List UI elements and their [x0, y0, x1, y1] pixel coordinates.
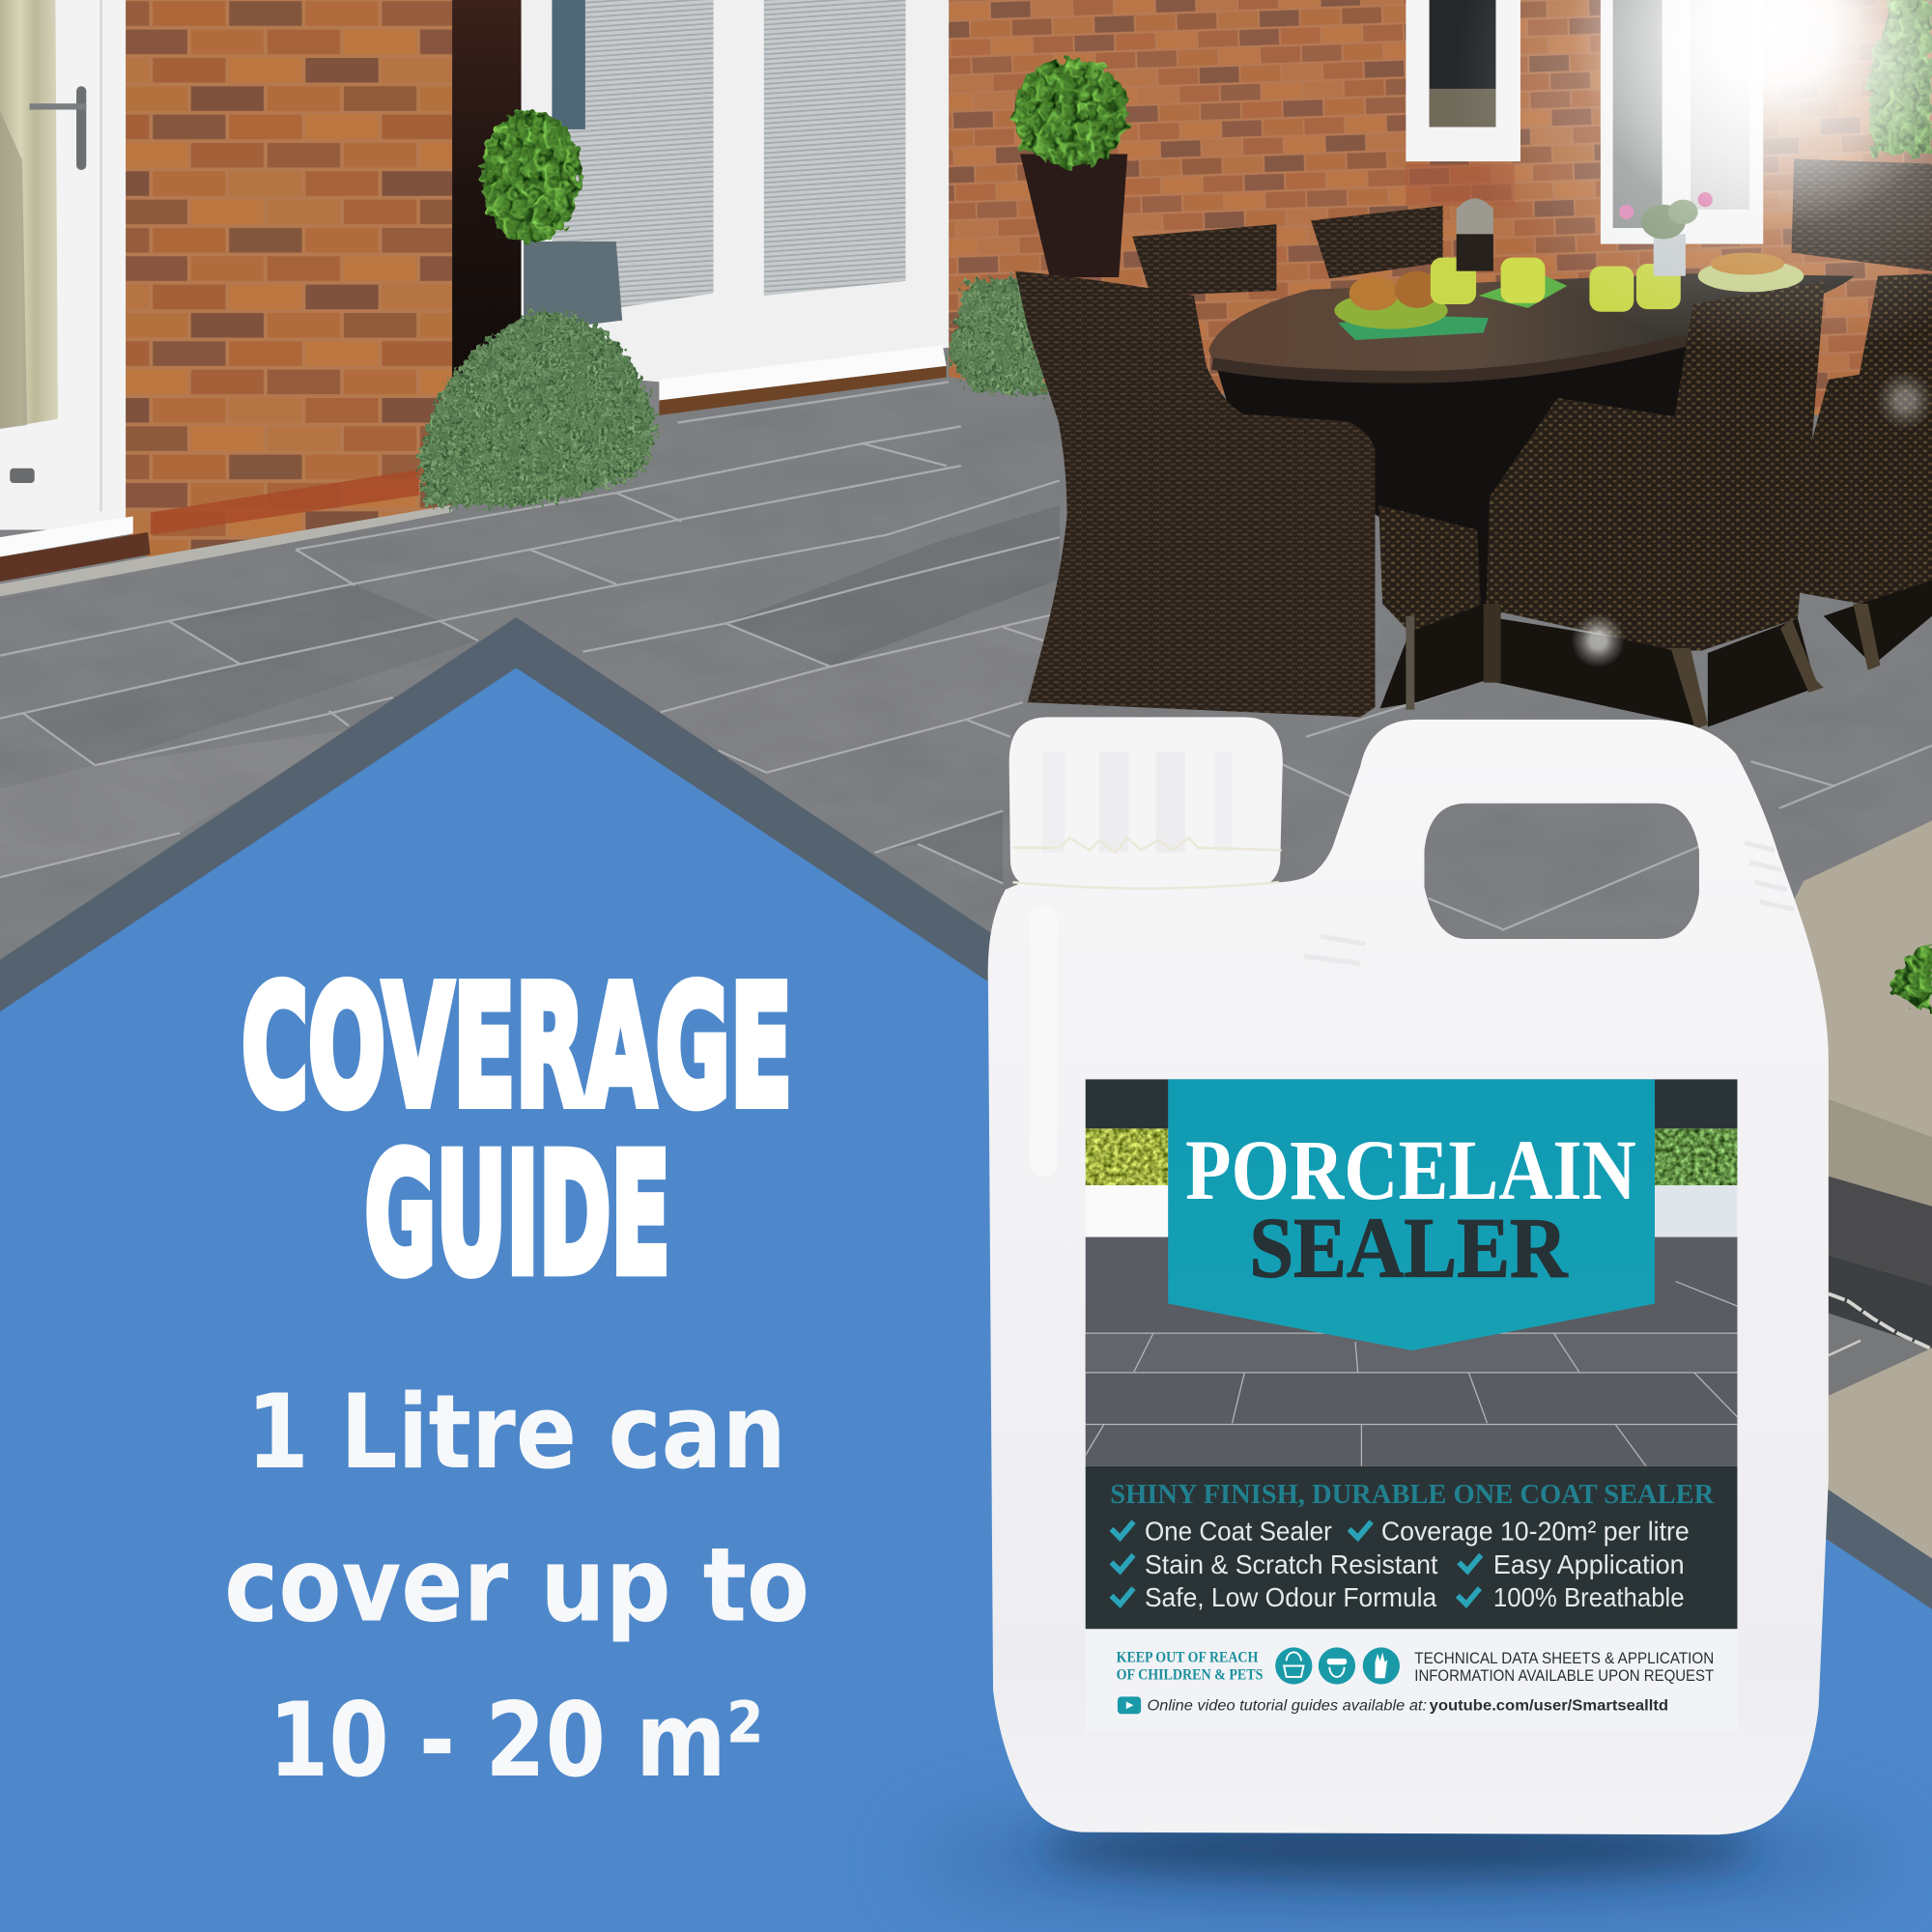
video guide text: youtube.com/user/Smartsealltd [1430, 1697, 1668, 1714]
teal banner [1168, 1079, 1655, 1350]
technical data note [1414, 1649, 1714, 1685]
back chair middle [1311, 206, 1443, 278]
lavender bush [419, 310, 656, 509]
safety icons [1275, 1647, 1400, 1685]
benefits list: Coverage 10-20m² per litre [1381, 1516, 1690, 1546]
benefits list: Easy Application [1493, 1549, 1685, 1579]
sun glare [1571, 0, 1932, 228]
label dark top strip [1086, 1079, 1737, 1128]
front centre wicker chair [1406, 281, 1825, 729]
technical data note: TECHNICAL DATA SHEETS & APPLICATION [1414, 1649, 1714, 1667]
coverage statement: 10 - 20 m² [269, 1681, 764, 1800]
grass tuft [1889, 944, 1932, 1011]
brick wall right [949, 0, 1932, 419]
label planter left [1086, 1128, 1168, 1237]
lens sparkle [1571, 613, 1625, 668]
label benefits panel [1086, 1466, 1737, 1629]
heading: coverage guide [242, 952, 792, 1311]
heading: coverage guide: GUIDE [365, 1119, 670, 1311]
right door [1601, 0, 1763, 244]
top-right plant [1868, 0, 1932, 154]
broad bottle shadow [912, 1799, 1897, 1922]
benefits heading: SHINY FINISH, DURABLE ONE COAT SEALER [1110, 1480, 1715, 1510]
red brick course [151, 469, 419, 535]
gravel strip [0, 505, 453, 596]
front left wicker chair [1015, 271, 1375, 717]
benefits list [1145, 1516, 1690, 1612]
benefits list: Stain & Scratch Resistant [1145, 1549, 1438, 1579]
dark table base [1213, 332, 1725, 616]
coverage statement [224, 1373, 810, 1800]
technical data note: INFORMATION AVAILABLE UPON REQUEST [1414, 1666, 1714, 1685]
patio paving [0, 377, 1932, 931]
left door and frame [0, 0, 151, 582]
small window [1406, 0, 1520, 206]
dark alcove [452, 0, 522, 394]
right stone steps [1775, 820, 1932, 1565]
heading: coverage guide: COVERAGE [242, 952, 792, 1144]
chevron dark outline band [0, 617, 1932, 1932]
label title: porcelain: PORCELAIN [1185, 1122, 1636, 1218]
bottle body with handle [988, 720, 1829, 1834]
bottle cap [1009, 717, 1283, 889]
label paving [1086, 1237, 1737, 1466]
table top [1208, 273, 1855, 375]
keep out warning: KEEP OUT OF REACH [1117, 1650, 1258, 1666]
under-table chair [1378, 505, 1481, 632]
wall tone wash left [126, 0, 452, 557]
wide sun wash [1454, 0, 1932, 357]
table setting [1334, 192, 1804, 340]
product bottle [988, 717, 1829, 1834]
check marks [1112, 1521, 1481, 1605]
french doors [522, 0, 949, 416]
right wicker chair [1792, 273, 1932, 670]
topiary ball left [482, 110, 581, 242]
keep out warning: OF CHILDREN & PETS [1117, 1667, 1263, 1684]
table rim [1212, 340, 1687, 377]
product label [1086, 1079, 1737, 1732]
label planter right [1655, 1128, 1737, 1237]
body highlights [1030, 842, 1794, 1177]
video guide text: Online video tutorial guides available at: [1148, 1697, 1427, 1714]
chair shadows on patio [1380, 579, 1932, 727]
bottle shadow [1041, 1819, 1756, 1878]
back chair right [1792, 159, 1932, 271]
benefits list: One Coat Sealer [1145, 1516, 1332, 1546]
video icon [1118, 1696, 1141, 1714]
brick wall left [126, 0, 452, 557]
chevron blue panel [0, 668, 1932, 1932]
label title: sealer: SEALER [1249, 1200, 1569, 1295]
lens sparkle right [1875, 371, 1932, 430]
benefits list: Safe, Low Odour Formula [1145, 1582, 1437, 1612]
coverage statement: 1 Litre can [246, 1373, 786, 1492]
benefits list: 100% Breathable [1493, 1582, 1685, 1612]
coverage statement: cover up to [224, 1525, 810, 1644]
back chair left [1132, 224, 1276, 296]
topiary right [1012, 59, 1128, 277]
keep out warning [1117, 1650, 1263, 1684]
wall tone wash right [949, 0, 1932, 419]
hedge behind chair [947, 277, 1050, 394]
